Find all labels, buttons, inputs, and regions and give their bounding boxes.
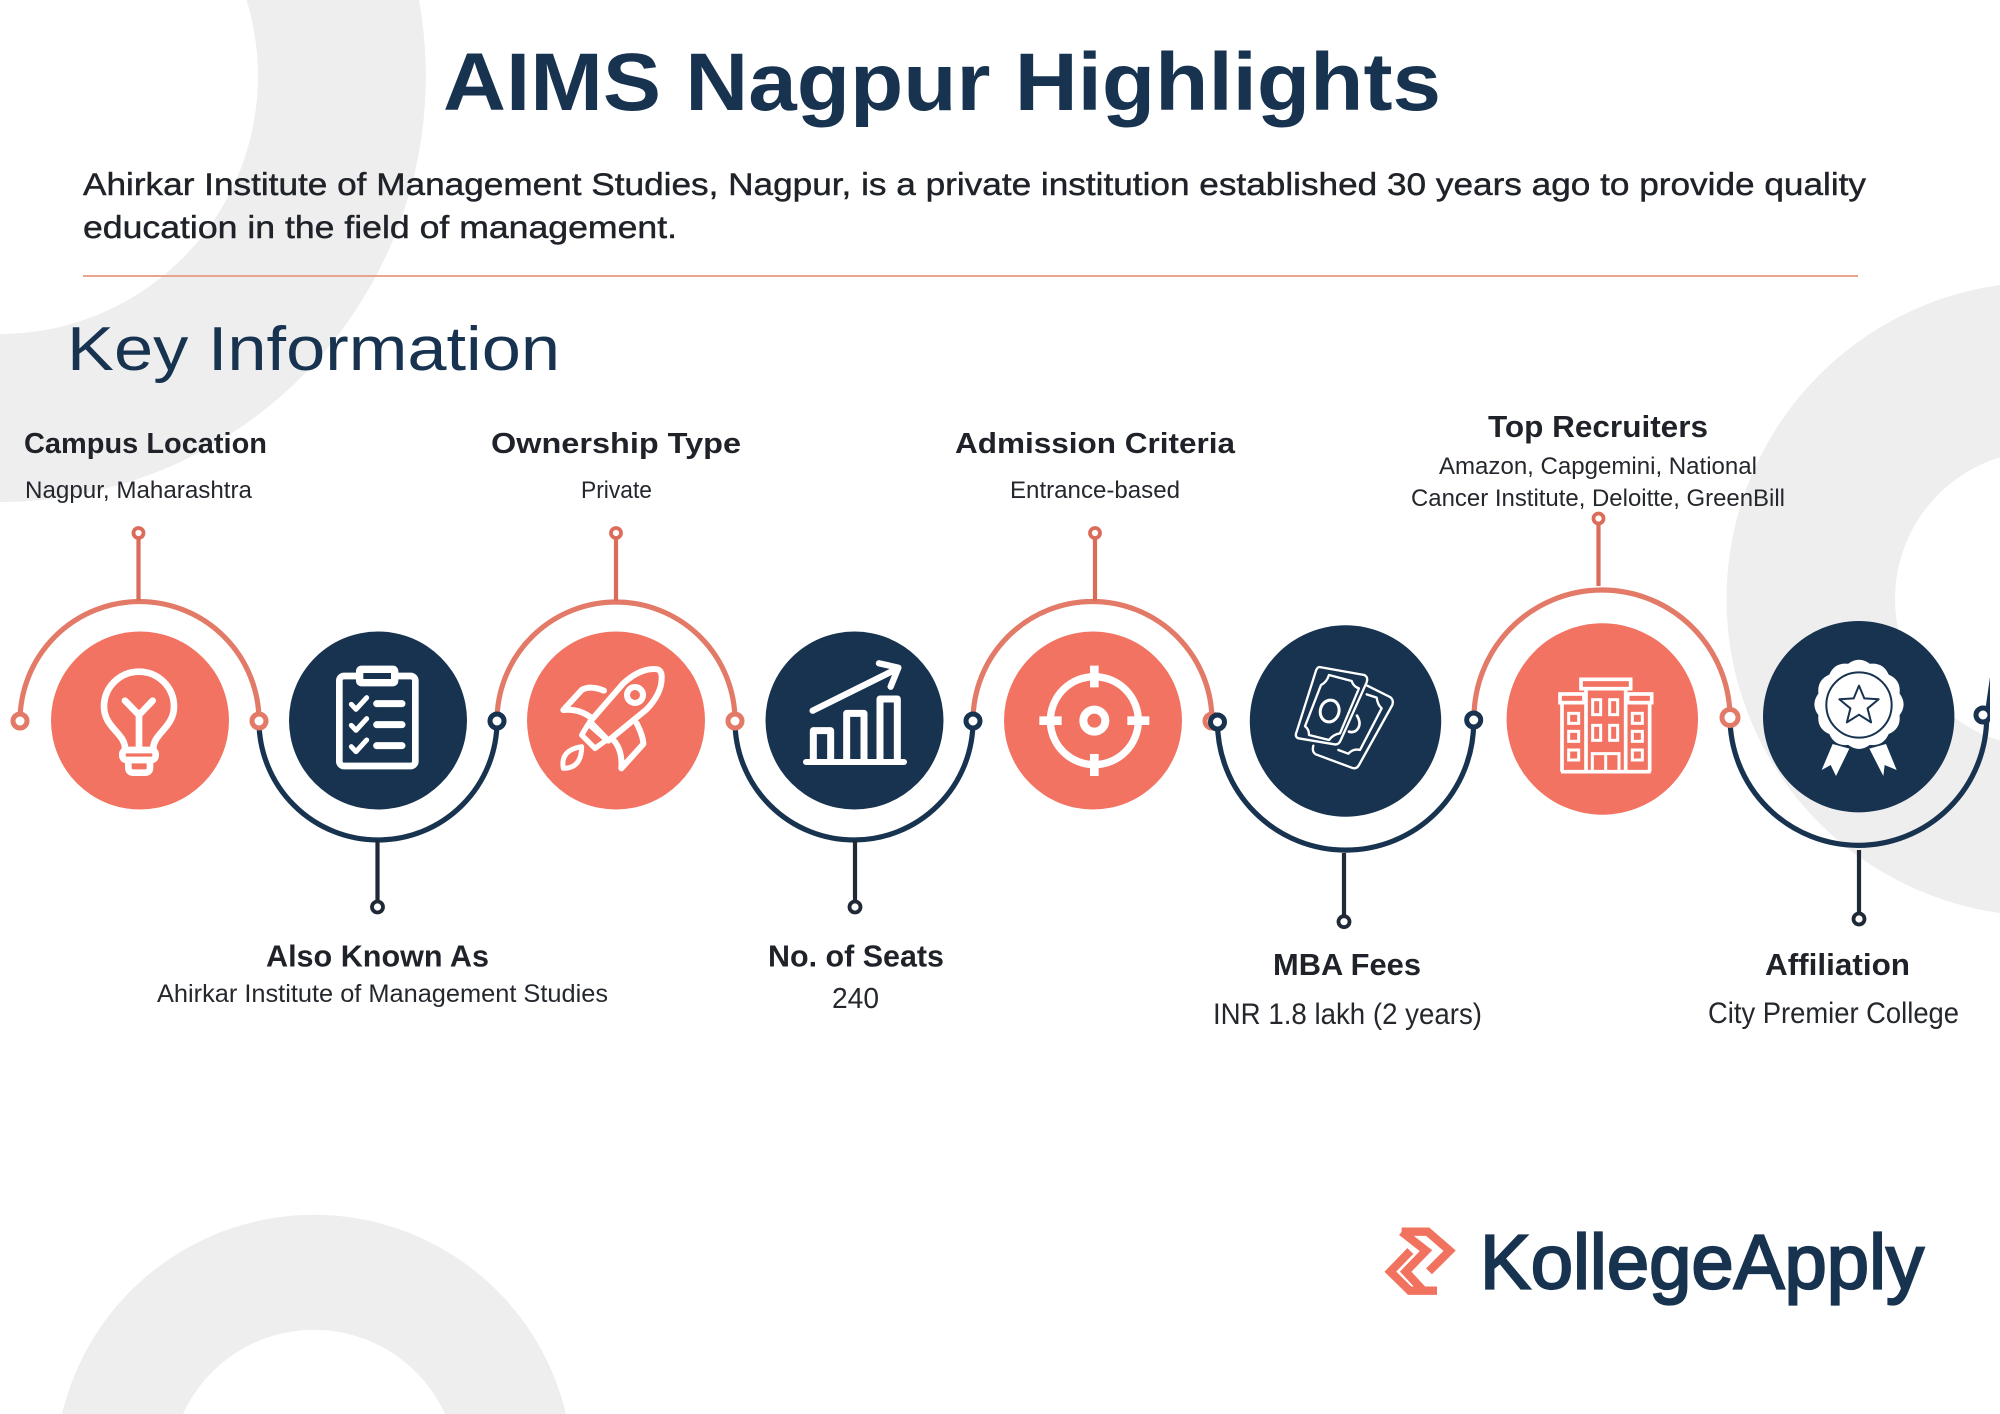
title: AIMS Nagpur Highlights — [443, 37, 1441, 128]
item: top recruiters — [1411, 409, 1785, 815]
item: ownership type — [491, 428, 741, 810]
item: also known as — [157, 632, 608, 1008]
intro paragraph: education in the field of management. — [83, 209, 677, 245]
item: campus location — [24, 428, 267, 810]
item: admission criteria: Entrance-based — [1010, 477, 1180, 504]
icon: banknotes — [1296, 667, 1393, 768]
item: number of seats: No. of Seats — [768, 938, 944, 974]
section heading: key information: Key Information — [67, 315, 560, 384]
intro paragraph: Ahirkar Institute of Management Studies, Nagpur, is a private institution established 30 years ago to provide quality — [83, 166, 1866, 202]
connector: wave timeline — [13, 590, 1990, 850]
item: affiliation: Affiliation — [1765, 947, 1910, 982]
item: top recruiters: Amazon, Capgemini, National — [1439, 453, 1757, 480]
item: MBA fees: INR 1.8 lakh (2 years) — [1213, 998, 1482, 1031]
icon: target crosshair — [1039, 666, 1149, 776]
icon: award rosette — [1814, 660, 1904, 776]
item: also known as: Also Known As — [266, 938, 489, 974]
item: MBA fees: MBA Fees — [1273, 947, 1421, 982]
item: top recruiters: Cancer Institute, Deloitte, GreenBill — [1411, 485, 1785, 512]
icon: clipboard checklist — [339, 669, 415, 766]
item: campus location: Nagpur, Maharashtra — [25, 477, 253, 504]
logo: KollegeApply: KollegeApply — [1480, 1220, 1924, 1306]
icon: logo chevrons — [1390, 1232, 1450, 1291]
item: affiliation: City Premier College — [1708, 997, 1959, 1030]
item: MBA fees — [1213, 625, 1482, 1031]
item: campus location: Campus Location — [24, 428, 267, 460]
item: top recruiters: Top Recruiters — [1488, 409, 1708, 444]
item: number of seats: 240 — [832, 983, 879, 1015]
item: ownership type: Private — [581, 477, 652, 504]
icon: rising bar chart — [806, 663, 904, 762]
icon: rocket — [563, 669, 662, 768]
item: number of seats — [766, 632, 944, 1015]
icon: office building — [1560, 679, 1652, 772]
item: affiliation — [1708, 621, 1959, 1030]
item: ownership type: Ownership Type — [491, 428, 741, 460]
item: admission criteria — [955, 428, 1236, 810]
intro paragraph — [83, 166, 1866, 245]
item: admission criteria: Admission Criteria — [955, 428, 1236, 460]
icon: light bulb — [104, 672, 174, 773]
item: also known as: Ahirkar Institute of Management Studies — [157, 980, 608, 1008]
